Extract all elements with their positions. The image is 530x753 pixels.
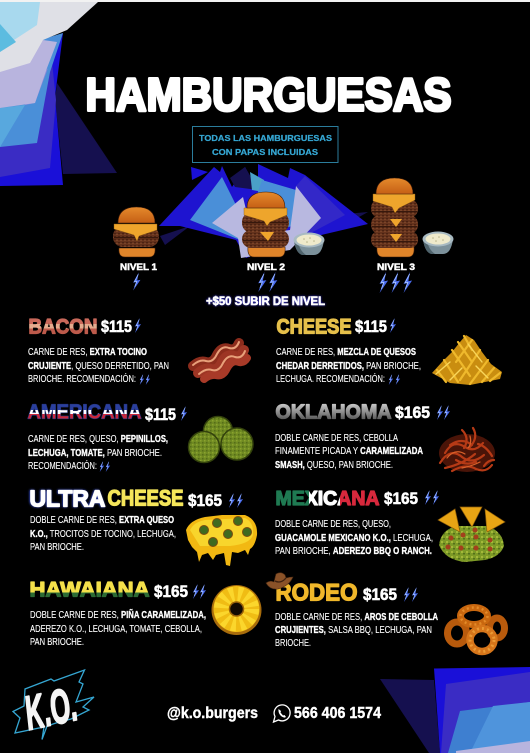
item: mexicana: $165 <box>384 489 418 508</box>
item: mexicana: PAN BRIOCHE, ADEREZO BBQ O RANCH. <box>275 545 432 557</box>
icon: salsa bowl 1 <box>294 232 324 255</box>
item: hawaiana: HAWAIANA <box>30 578 150 602</box>
burger: nivel 1 <box>113 207 159 257</box>
item: ultra cheese: $165 <box>188 491 222 510</box>
item: americana: AMERICANA <box>28 400 142 424</box>
icon: caramelized onion <box>439 428 495 472</box>
upgrade note: +$50 SUBIR DE NIVEL <box>206 296 325 308</box>
item: hawaiana: ADEREZO K.O., LECHUGA, TOMATE, CEBOLLA, <box>30 623 202 635</box>
item: rodeo <box>275 580 438 649</box>
item: ultra cheese: PAN BRIOCHE. <box>30 541 84 553</box>
item: bacon: CRUJIENTE, QUESO DERRETIDO, PAN <box>28 360 169 372</box>
icon: bacon strips <box>193 342 247 379</box>
item: cheese: CHEDAR DERRETIDOS, PAN BRIOCHE, <box>276 360 421 372</box>
item: rodeo: BRIOCHE. <box>275 637 311 649</box>
item: bacon: BACON <box>28 314 98 338</box>
callout: papas incluidas: CON PAPAS INCLUIDAS <box>212 147 319 157</box>
label: nivel 1 <box>120 262 158 290</box>
item: americana: LECHUGA, TOMATE, PAN BRIOCHE. <box>28 447 162 459</box>
item: oklahoma <box>275 400 450 471</box>
icon: onion rings <box>448 608 504 652</box>
item: oklahoma: FINAMENTE PICADA Y CARAMELIZADA <box>275 445 423 457</box>
item: hawaiana: DOBLE CARNE DE RES, PIÑA CARAMELIZADA, <box>30 608 206 621</box>
icon: whatsapp <box>274 705 290 722</box>
decoration: shards behind burgers <box>159 164 368 258</box>
icon: salsa bowl 2 <box>422 232 454 254</box>
item: oklahoma: $165 <box>395 403 430 422</box>
item: ultra cheese: DOBLE CARNE DE RES, EXTRA QUESO <box>30 514 174 526</box>
title: HAMBURGUESAS <box>86 68 452 120</box>
logo: K.O. <box>13 670 94 741</box>
item: hawaiana: PAN BRIOCHE. <box>30 636 84 648</box>
item: bacon: CARNE DE RES, EXTRA TOCINO <box>28 346 147 358</box>
logo: K.O.: K.O. <box>20 678 82 741</box>
item: cheese: LECHUGA. RECOMENDACIÓN: <box>276 372 385 385</box>
item: americana: CARNE DE RES, QUESO, PEPINILLOS, <box>28 433 168 445</box>
item: oklahoma: OKLAHOMA <box>276 400 392 424</box>
item: hawaiana: $165 <box>154 582 188 601</box>
item: cheese: CHEESE <box>276 314 352 338</box>
label: nivel 3 <box>377 262 415 293</box>
item: ultra cheese: K.O., TROCITOS DE TOCINO, LECHUGA, <box>30 528 176 540</box>
decoration: bottom-right crystal shards <box>380 667 530 753</box>
phone number: 566 406 1574 <box>294 705 381 722</box>
item: mexicana: DOBLE CARNE DE RES, QUESO, <box>275 518 391 530</box>
item: hawaiana <box>30 578 206 648</box>
item: ultra cheese: CHEESE <box>108 486 184 510</box>
label: nivel 2 <box>247 262 285 292</box>
item: mexicana <box>275 488 439 557</box>
item: bacon <box>28 314 169 385</box>
item: bacon: BRIOCHE. RECOMENDACIÓN: <box>28 372 136 385</box>
callout: papas incluidas: TODAS LAS HAMBURGUESAS <box>199 133 332 143</box>
item: mexicana: MEXICANA <box>276 488 380 510</box>
item: oklahoma: DOBLE CARNE DE RES, CEBOLLA <box>275 432 398 444</box>
item: ultra cheese: ULTRA <box>30 486 106 512</box>
decoration: top-left crystal shards <box>0 2 117 186</box>
item: americana: RECOMENDACIÓN: <box>28 459 97 472</box>
burger: nivel 2 <box>242 192 289 257</box>
icon: pineapple ring <box>212 585 262 635</box>
item: rodeo: DOBLE CARNE DE RES, AROS DE CEBOLLA <box>275 611 438 623</box>
label: nivel 1: NIVEL 1 <box>120 262 158 273</box>
handle: instagram: @k.o.burgers <box>167 705 258 722</box>
label: nivel 2: NIVEL 2 <box>247 262 285 273</box>
icon: guacamole with nachos <box>438 507 505 562</box>
icon: melted cheese with jalapeños <box>186 515 257 566</box>
item: rodeo: $165 <box>363 585 397 604</box>
item: rodeo: RODEO <box>276 580 358 606</box>
item: americana <box>28 400 187 472</box>
item: mexicana: GUACAMOLE MEXICANO K.O., LECHUGA, <box>275 532 433 544</box>
item: americana: $115 <box>145 405 176 424</box>
item: oklahoma: SMASH, QUESO, PAN BRIOCHE. <box>275 459 393 471</box>
item: rodeo: CRUJIENTES, SALSA BBQ, LECHUGA, PAN <box>275 624 432 636</box>
item: cheese <box>276 314 421 385</box>
icon: pickles <box>188 416 253 462</box>
item: cheese: $115 <box>355 317 387 336</box>
item: bacon: $115 <box>101 317 132 336</box>
item: cheese: CARNE DE RES, MEZCLA DE QUESOS <box>276 346 416 358</box>
icon: cowboy hat <box>266 573 293 589</box>
item: ultra cheese <box>30 486 243 553</box>
callout: papas incluidas <box>192 126 338 162</box>
icon: fries pile <box>432 335 502 385</box>
label: nivel 3: NIVEL 3 <box>377 262 415 273</box>
burger: nivel 3 <box>371 178 418 257</box>
